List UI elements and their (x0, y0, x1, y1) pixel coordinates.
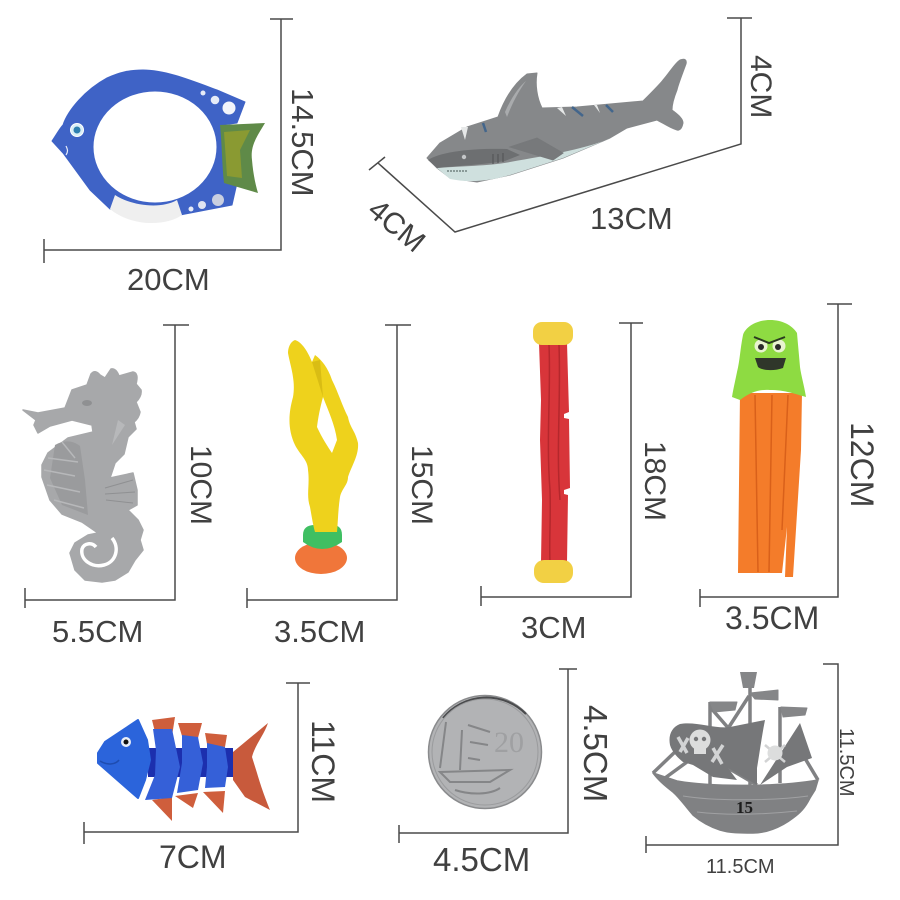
label: 20CM: 20CM (127, 262, 210, 297)
label: 3CM: 3CM (521, 610, 586, 645)
toy: striped fish (98, 717, 270, 821)
dimension: striped fish (84, 683, 310, 844)
dimension: fish ring height and width (44, 19, 293, 263)
label: 13CM: 13CM (590, 201, 673, 236)
label: 7CM: 7CM (159, 839, 227, 875)
dimension: coin (399, 669, 577, 843)
label: 3.5CM octopus: 3.5CM (725, 600, 819, 636)
toy: yellow seaweed (288, 340, 358, 574)
toy: blue fish ring (52, 70, 265, 223)
toy: seahorse (23, 369, 143, 582)
toy: octopus (732, 320, 806, 577)
toy: coin (428, 696, 542, 808)
label: 18CM: 18CM (638, 441, 671, 521)
label: 11CM: 11CM (305, 720, 341, 803)
toy: coin: 20 (494, 726, 524, 759)
label: 4CM height: 4CM (744, 55, 777, 118)
label: 4.5CM vertical: 4.5CM (577, 705, 614, 802)
dimension: seahorse (25, 325, 189, 608)
toy: red stick (533, 322, 573, 583)
dimension: shark lines (369, 18, 752, 232)
dimension: ship (646, 664, 838, 853)
toy: pirate ship (653, 672, 818, 833)
label: 14.5CM: 14.5CM (285, 88, 320, 197)
dimension: stick (481, 323, 643, 606)
label: 15CM: 15CM (405, 445, 438, 525)
label: 3.5CM seaweed: 3.5CM (274, 614, 365, 649)
label: 5.5CM: 5.5CM (52, 614, 143, 649)
label: 10CM: 10CM (184, 445, 217, 525)
hull number: 15 (736, 798, 753, 817)
label: 4.5CM horizontal: 4.5CM (433, 841, 530, 878)
toy: grey shark (427, 59, 686, 182)
label: 12CM: 12CM (844, 422, 880, 507)
label: 11.5CM horizontal: 11.5CM (706, 856, 775, 878)
label: 4CM depth: 4CM (362, 193, 431, 259)
dimension: octopus (700, 304, 852, 607)
label: 11.5CM vertical: 11.5CM (835, 728, 857, 797)
dimension: seaweed (247, 325, 411, 608)
